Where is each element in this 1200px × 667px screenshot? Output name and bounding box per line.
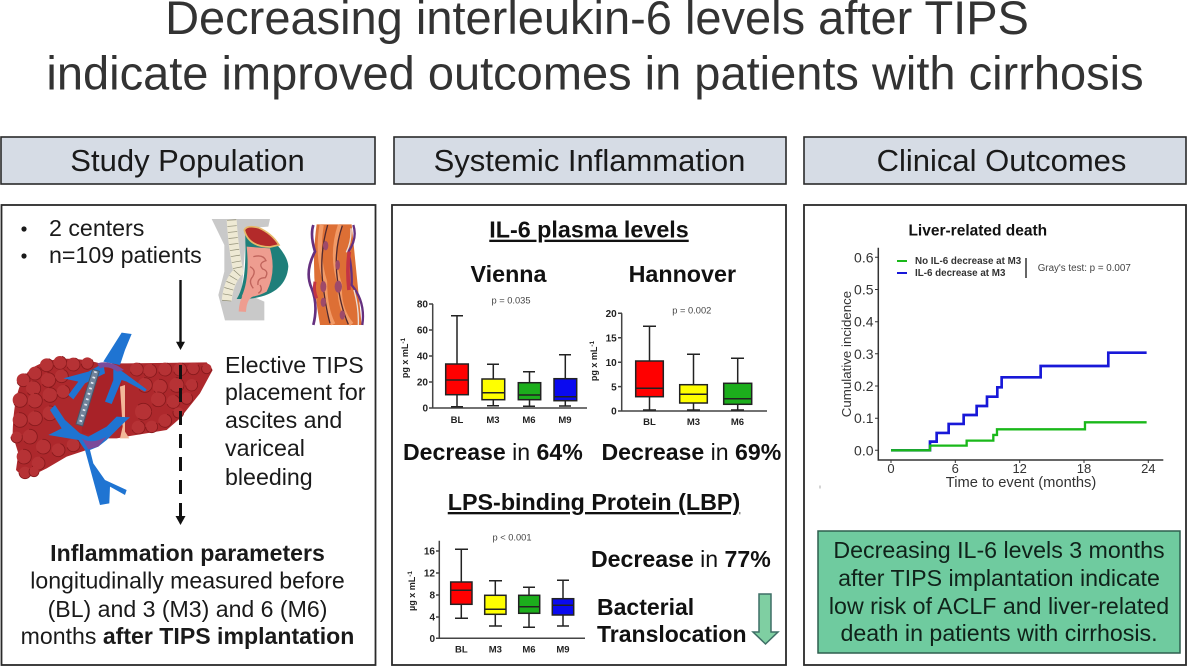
text: Hannover decrease: Decrease in 69% <box>602 439 781 465</box>
heading: systemic inflammation <box>394 137 786 184</box>
legend <box>897 256 1131 279</box>
chart: Hannover IL-6 box plot: 15 <box>606 334 617 344</box>
chart: Vienna IL-6 box plot: pg x mL <box>400 344 410 378</box>
text: inflammation parameters: months after TIPS implantation <box>21 623 354 649</box>
chart: Hannover IL-6 box plot: 20 <box>606 309 617 320</box>
chart: Vienna IL-6 box plot: -1 <box>400 337 407 344</box>
chart: LBP box plot: BL <box>455 645 468 656</box>
chart: cumulative incidence: 24 <box>1141 461 1156 476</box>
chart: Vienna IL-6 box plot: 60 <box>417 326 428 336</box>
line: IL-6 decrease <box>891 353 1147 450</box>
text: Vienna decrease: Decrease in 64% <box>403 439 583 465</box>
text: study size <box>21 215 202 268</box>
chart: cumulative incidence: 0.6 <box>854 250 874 266</box>
icon: cirrhotic liver with TIPS stent <box>11 333 213 505</box>
chart: cumulative incidence: 0.0 <box>854 442 874 458</box>
legend: IL-6 decrease at M3 <box>915 268 1006 279</box>
chart: Vienna IL-6 box plot: 80 <box>417 300 428 310</box>
heading: Vienna: Vienna <box>471 261 548 287</box>
chart: cumulative incidence: 12 <box>1012 461 1027 476</box>
legend: Gray's test: p = 0.007 <box>1038 263 1131 274</box>
text: study size: 2 centers <box>49 215 144 241</box>
icon: varices vessel <box>309 224 363 325</box>
arrow: decrease <box>753 594 778 644</box>
heading: clinical outcomes <box>804 137 1186 184</box>
text: bacterial translocation: Bacterial <box>597 594 694 620</box>
chart: Hannover IL-6 box plot: M3 <box>687 417 700 428</box>
arrow: dashed <box>176 365 186 525</box>
heading: liver-related death: Liver-related death <box>908 223 1047 240</box>
chart: Hannover IL-6 box plot: M6 <box>731 417 744 428</box>
heading: systemic inflammation: Systemic Inflammation <box>434 143 745 178</box>
chart: Vienna IL-6 box plot: p = 0.035 <box>491 295 531 305</box>
chart: LBP box plot: M6 <box>522 645 536 656</box>
text: inflammation parameters: (BL) and 3 (M3) and 6 (M6) <box>48 596 327 622</box>
text: TIPS indication: variceal <box>225 435 305 461</box>
heading: study population: Study Population <box>70 143 305 178</box>
axis label: cumulative incidence: Cumulative incidence <box>839 291 854 417</box>
chart: Hannover IL-6 box plot: BL <box>643 417 656 428</box>
chart: Hannover IL-6 box plot: -1 <box>589 340 596 347</box>
callout: conclusion: Decreasing IL-6 levels 3 months <box>833 537 1165 563</box>
chart: Vienna IL-6 box plot: M9 <box>558 415 572 426</box>
panel: clinical outcomes <box>804 205 1186 665</box>
title <box>46 0 1144 100</box>
text: inflammation parameters <box>21 540 354 649</box>
chart: LBP box plot <box>407 533 585 656</box>
chart: cumulative incidence: 6 <box>952 461 959 476</box>
chart: cumulative incidence: 0.4 <box>854 314 874 330</box>
chart: cumulative incidence: 0.3 <box>854 346 874 362</box>
chart: Hannover IL-6 box plot: 0 <box>611 406 617 418</box>
callout: conclusion <box>818 531 1180 653</box>
chart: LBP box plot: p < 0.001 <box>492 533 532 543</box>
chart: cumulative incidence <box>839 248 1163 491</box>
text: inflammation parameters: longitudinally measured before <box>30 568 345 594</box>
chart: cumulative incidence: 0.1 <box>854 410 874 426</box>
chart: LBP box plot: 12 <box>424 568 435 580</box>
heading: LPS-binding protein: LPS-binding Protein (LBP) <box>448 489 740 515</box>
chart: Hannover IL-6 box plot: pg x mL <box>589 347 599 381</box>
chart: Vienna IL-6 box plot: 0 <box>422 404 428 414</box>
heading: clinical outcomes: Clinical Outcomes <box>877 143 1126 178</box>
chart: Vienna IL-6 box plot <box>400 295 587 426</box>
text: TIPS indication: Elective TIPS <box>225 352 364 378</box>
chart: LBP box plot: -1 <box>407 571 414 577</box>
text: LBP decrease: Decrease in 77% <box>591 546 771 572</box>
line: no IL-6 decrease <box>891 422 1147 450</box>
chart: LBP box plot: 0 <box>429 634 435 645</box>
chart: Vienna IL-6 box plot: BL <box>451 415 464 426</box>
text: TIPS indication: placement for <box>225 379 366 405</box>
chart: LBP box plot: 16 <box>424 546 435 558</box>
chart: Hannover IL-6 box plot <box>589 305 767 428</box>
text: study size: n=109 patients <box>49 242 202 268</box>
arrow: solid <box>176 280 185 350</box>
chart: cumulative incidence: 0.2 <box>854 378 874 394</box>
chart: Vienna IL-6 box plot: M3 <box>486 415 500 426</box>
chart: LBP box plot: M3 <box>489 645 502 656</box>
chart: LBP box plot: M9 <box>556 645 570 656</box>
chart: Vienna IL-6 box plot: 20 <box>417 378 428 388</box>
callout: conclusion: after TIPS implantation indicate <box>838 565 1160 591</box>
legend: No IL-6 decrease at M3 <box>915 256 1022 267</box>
text: inflammation parameters: Inflammation parameters <box>50 540 325 566</box>
chart: LBP box plot: 4 <box>429 612 435 624</box>
panel: systemic inflammation <box>392 205 786 665</box>
chart: Vienna IL-6 box plot: M6 <box>522 415 536 426</box>
heading: IL-6 plasma levels: IL-6 plasma levels <box>489 217 689 243</box>
chart: Hannover IL-6 box plot: 5 <box>611 382 617 394</box>
heading: study population <box>1 137 375 184</box>
chart: LBP box plot: µg x mL <box>407 577 417 611</box>
chart: Vienna IL-6 box plot: 40 <box>417 352 428 362</box>
heading: Hannover: Hannover <box>629 261 736 287</box>
callout: conclusion: low risk of ACLF and liver-related <box>829 593 1169 619</box>
chart: Hannover IL-6 box plot: p = 0.002 <box>672 305 711 315</box>
panel: study population <box>2 205 376 665</box>
text: TIPS indication: ascites and <box>225 407 342 433</box>
icon: ascites abdomen <box>212 219 288 320</box>
chart: cumulative incidence: 0 <box>887 461 895 476</box>
chart: LBP box plot: 8 <box>429 590 435 602</box>
text: TIPS indication <box>225 352 366 490</box>
text: bacterial translocation <box>597 594 747 647</box>
chart: cumulative incidence: 0.5 <box>854 282 874 298</box>
callout: conclusion: death in patients with cirrhosis. <box>840 620 1158 646</box>
axis label: time to event: Time to event (months) <box>946 475 1096 491</box>
text: bacterial translocation: Translocation <box>597 621 747 647</box>
title: indicate improved outcomes in patients with cirrhosis <box>46 46 1144 100</box>
chart: cumulative incidence: 18 <box>1077 461 1091 476</box>
chart: Hannover IL-6 box plot: 10 <box>606 358 617 369</box>
text: TIPS indication: bleeding <box>225 464 313 490</box>
